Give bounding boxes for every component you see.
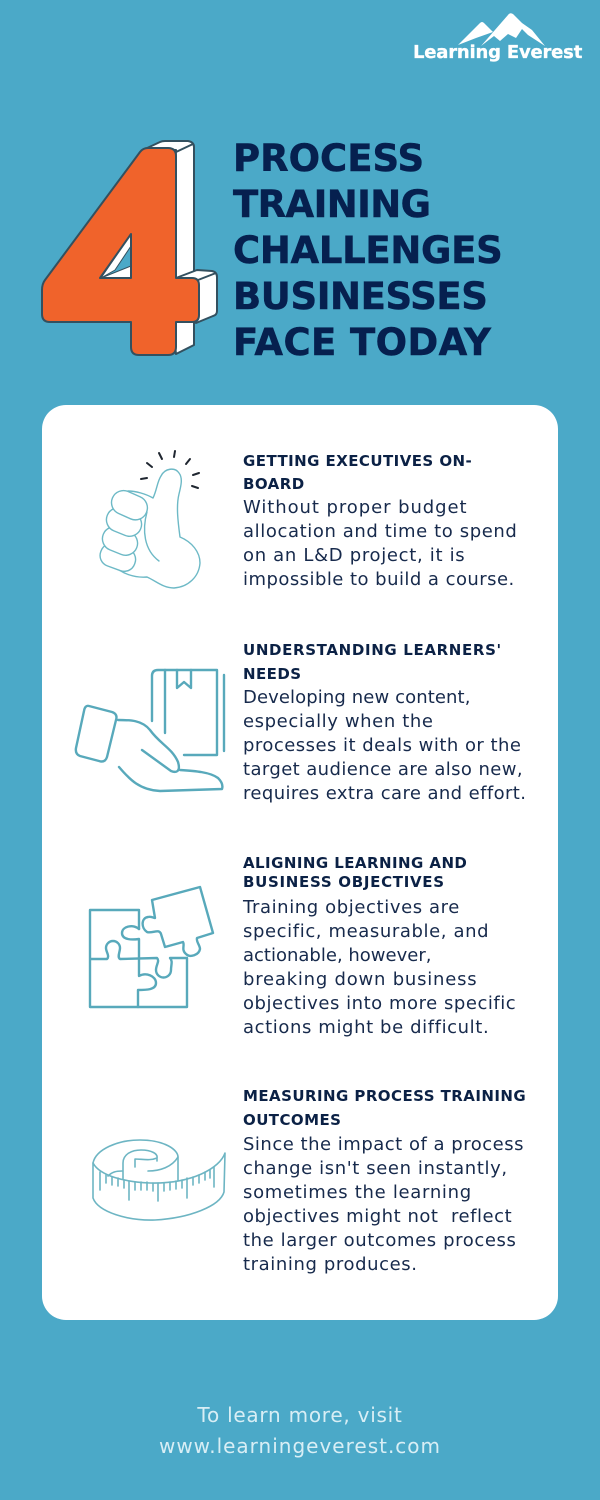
text: getting executives on-board: GETTING EXECUTIVES ON-	[243, 452, 472, 470]
title: TRAINING	[233, 183, 430, 226]
icon: puzzle pieces	[88, 886, 214, 1008]
text: measuring process training outcomes: sometimes the learning	[243, 1182, 472, 1203]
text: understanding learners' needs	[243, 641, 526, 804]
4 extrusion	[101, 141, 217, 354]
icon: hand with book	[74, 668, 226, 792]
title: CHALLENGES	[233, 229, 502, 272]
text: aligning learning and business objectives	[242, 854, 516, 1038]
title: BUSINESSES	[233, 275, 487, 318]
text: measuring process training outcomes: objectives might not reflect	[243, 1206, 512, 1227]
4 face	[42, 148, 199, 355]
footer call to action: To learn more, visit	[197, 1403, 403, 1427]
text: understanding learners' needs: NEEDS	[243, 665, 302, 683]
text: measuring process training outcomes: the larger outcomes process	[243, 1230, 516, 1251]
text: aligning learning and business objectives: specific, measurable, and	[243, 921, 489, 942]
icon: thumbs up	[99, 450, 201, 589]
footer call to action: www.learningeverest.com	[159, 1434, 441, 1458]
text: aligning learning and business objectives: objectives into more specific	[243, 993, 516, 1014]
panel: challenges card	[42, 405, 558, 1320]
logo: Learning Everest	[413, 13, 582, 63]
text: measuring process training outcomes: change isn't seen instantly,	[243, 1158, 508, 1179]
footer call to action	[159, 1403, 441, 1458]
text: measuring process training outcomes: MEASURING PROCESS TRAINING	[243, 1087, 526, 1105]
big numeral 4	[41, 140, 218, 356]
icon: measuring tape	[92, 1139, 226, 1221]
title: PROCESS	[233, 137, 424, 180]
text: measuring process training outcomes	[243, 1087, 526, 1275]
text: aligning learning and business objectives: BUSINESS OBJECTIVES	[243, 873, 445, 891]
text: measuring process training outcomes: Since the impact of a process	[243, 1134, 524, 1155]
text: understanding learners' needs: requires extra care and effort.	[243, 783, 526, 804]
text: understanding learners' needs: Developing new content,	[243, 687, 471, 708]
text: aligning learning and business objectives: actionable, however,	[243, 945, 431, 966]
text: getting executives on-board: impossible to build a course.	[243, 569, 515, 590]
text: aligning learning and business objectives: breaking down business	[243, 969, 477, 990]
text: aligning learning and business objectives: actions might be difficult.	[243, 1017, 489, 1038]
text: getting executives on-board	[243, 452, 517, 590]
text: measuring process training outcomes: training produces.	[243, 1254, 418, 1275]
text: aligning learning and business objectives: ALIGNING LEARNING AND	[243, 854, 467, 872]
text: getting executives on-board: allocation and time to spend	[243, 521, 517, 542]
text: measuring process training outcomes: OUTCOMES	[243, 1111, 341, 1129]
text: getting executives on-board: Without proper budget	[243, 497, 467, 518]
title	[232, 137, 502, 364]
text: understanding learners' needs: especially when the	[243, 711, 434, 732]
text: getting executives on-board: on an L&D project, it is	[243, 545, 465, 566]
logo wordmark: Learning Everest	[413, 42, 582, 63]
logo mountains	[458, 13, 545, 46]
text: getting executives on-board: BOARD	[243, 475, 305, 493]
text: understanding learners' needs: target audience are also new,	[243, 759, 523, 780]
text: aligning learning and business objectives: Training objectives are	[243, 897, 460, 918]
text: understanding learners' needs: processes it deals with or the	[243, 735, 521, 756]
title: FACE TODAY	[233, 321, 491, 364]
text: understanding learners' needs: UNDERSTANDING LEARNERS'	[243, 641, 502, 659]
